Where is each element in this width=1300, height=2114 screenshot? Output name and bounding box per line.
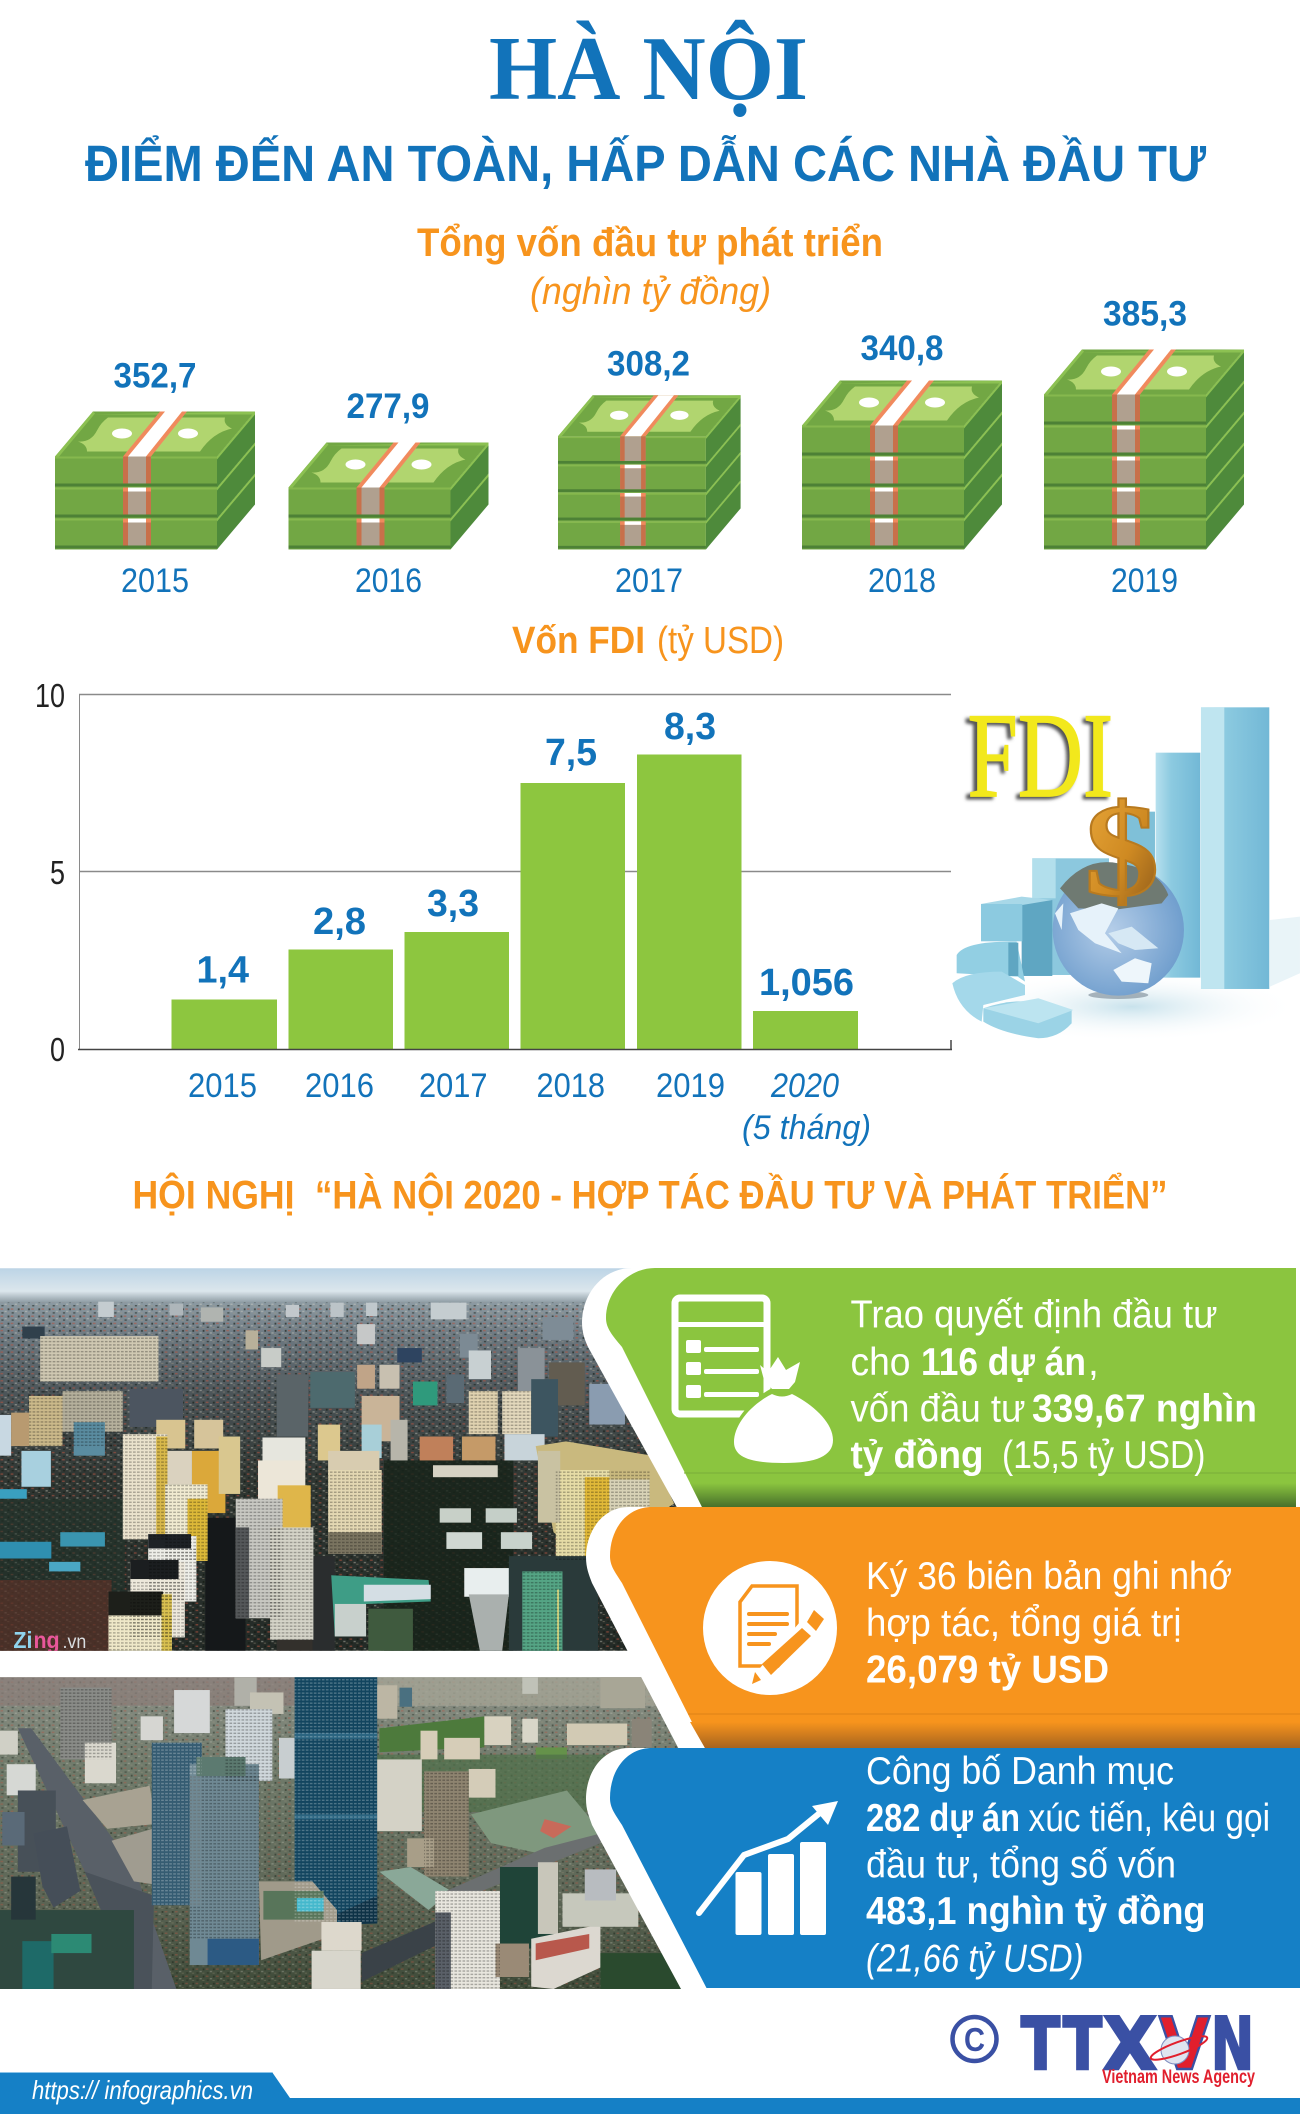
bar chart: FDI: 2,8 [313,901,366,943]
text: memoranda: 26,079 tỷ USD [866,1648,1109,1692]
logo: TTXVN: T [1021,2002,1060,2086]
money stack 2015 [55,356,255,600]
illustration: FDI globe and bars: $ [1084,776,1159,924]
text: project list: 282 dự án [866,1797,1020,1840]
logo: TTXVN: X [1103,2002,1157,2086]
icon: growth chart [699,1801,838,1935]
text: memoranda: hợp tác, tổng giá trị [866,1602,1182,1645]
footer bar [0,2072,1300,2114]
text: investment decisions: Trao quyết định đầu tư [850,1294,1218,1336]
illustration: FDI globe and bars: FDI [964,692,1110,826]
bar chart: FDI: 7,5 [545,732,597,774]
bar chart: FDI: 2018 [536,1067,605,1105]
money stack 2017 [558,344,741,600]
heading: total investment [417,221,883,313]
money stack 2015: 352,7 [114,356,196,396]
money stack 2015: 2015 [121,562,189,600]
subtitle: ĐIỂM ĐẾN AN TOÀN, HẤP DẪN CÁC NHÀ ĐẦU TƯ [85,134,1207,192]
text: memoranda [866,1555,1232,1692]
photo: Hanoi aerial view 2 [0,1677,700,1989]
text: investment decisions: tỷ đồng [850,1434,984,1477]
icon: document and pencil [703,1561,837,1695]
text: project list: đầu tư, tổng số vốn [866,1844,1176,1886]
text: project list: 483,1 nghìn tỷ đồng [866,1890,1206,1933]
bar chart: FDI: 8,3 [664,706,716,748]
bar chart: FDI: (5 tháng) [742,1109,871,1147]
logo: TTXVN: Vietnam News Agency [1102,2067,1255,2088]
heading: conference: “HÀ NỘI 2020 - HỢP TÁC ĐẦU TƯ VÀ PHÁT TRIỂN” [315,1170,1168,1218]
money stack 2017: 308,2 [607,344,690,384]
bar chart: FDI: 1,056 [759,962,854,1004]
bar chart: FDI: 2016 [305,1067,374,1105]
money stack 2019: 2019 [1111,562,1178,600]
text: investment decisions: vốn đầu tư [850,1388,1026,1430]
illustration: FDI globe and bars [952,689,1300,1042]
text: investment decisions: cho [850,1341,910,1384]
panel: project list [586,1748,1300,1989]
bar chart: FDI [35,677,952,1147]
text: investment decisions: , [1088,1341,1099,1384]
heading: total investment: (nghìn tỷ đồng) [530,271,771,313]
heading: FDI [512,620,784,662]
text: investment decisions: 339,67 nghìn [1032,1388,1257,1430]
bar chart: FDI: 1,4 [196,950,249,992]
logo: TTXVN: N [1211,2002,1254,2086]
bar chart: FDI: 2019 [656,1067,725,1105]
panel: investment decisions [582,1268,1296,1540]
logo: TTXVN: C [964,2021,985,2058]
heading: FDI: (tỷ USD) [657,620,784,662]
money stack 2019 [1044,294,1244,600]
text: project list: (21,66 tỷ USD) [866,1938,1084,1980]
text: investment decisions: 116 dự án [921,1341,1086,1384]
money stack 2017: 2017 [615,562,683,600]
money stack 2016: 277,9 [346,387,430,426]
money stack 2018: 2018 [868,562,936,600]
photo: Hanoi aerial view 1 [0,1268,700,1653]
money stack 2018: 340,8 [860,329,944,368]
photo: Hanoi aerial view 1: .vn [62,1630,86,1652]
text: project list [866,1750,1270,1980]
heading: conference [132,1170,1168,1218]
text: investment decisions: (15,5 tỷ USD) [1002,1434,1206,1477]
title: HÀ NỘI [489,18,808,119]
heading: conference: HỘI NGHỊ [132,1172,294,1218]
logo: TTXVN [952,2002,1255,2088]
logo: TTXVN: T [1063,2002,1102,2086]
bar chart: FDI: 2015 [188,1067,257,1105]
bar chart: FDI: 10 [35,677,65,714]
bar chart: FDI: 5 [50,854,65,891]
icon: list and money bag [675,1298,836,1466]
logo: TTXVN: V [1159,2002,1210,2086]
text: memoranda: Ký 36 biên bản ghi nhớ [866,1555,1232,1598]
money stack 2016 [288,387,488,600]
bar chart: FDI: 0 [50,1031,65,1068]
money stack 2018 [802,329,1002,600]
footer bar: https:// infographics.vn [32,2075,253,2105]
heading: total investment: Tổng vốn đầu tư phát triển [417,221,883,265]
bar chart: FDI: 3,3 [427,883,479,925]
money stack 2016: 2016 [355,562,422,600]
money stack 2019: 385,3 [1103,294,1187,334]
photo: Hanoi aerial view 1: ng [33,1627,60,1653]
illustration: FDI globe and bars: FDI [968,689,1113,823]
panel: memoranda [586,1507,1300,1780]
text: project list: Công bố Danh mục [866,1750,1174,1793]
bar chart: FDI: 2020 [770,1067,839,1105]
bar chart: FDI: 2017 [419,1067,488,1105]
text: investment decisions [850,1294,1257,1477]
photo: Hanoi aerial view 1: Zi [13,1627,32,1653]
heading: FDI: Vốn FDI [512,620,645,662]
